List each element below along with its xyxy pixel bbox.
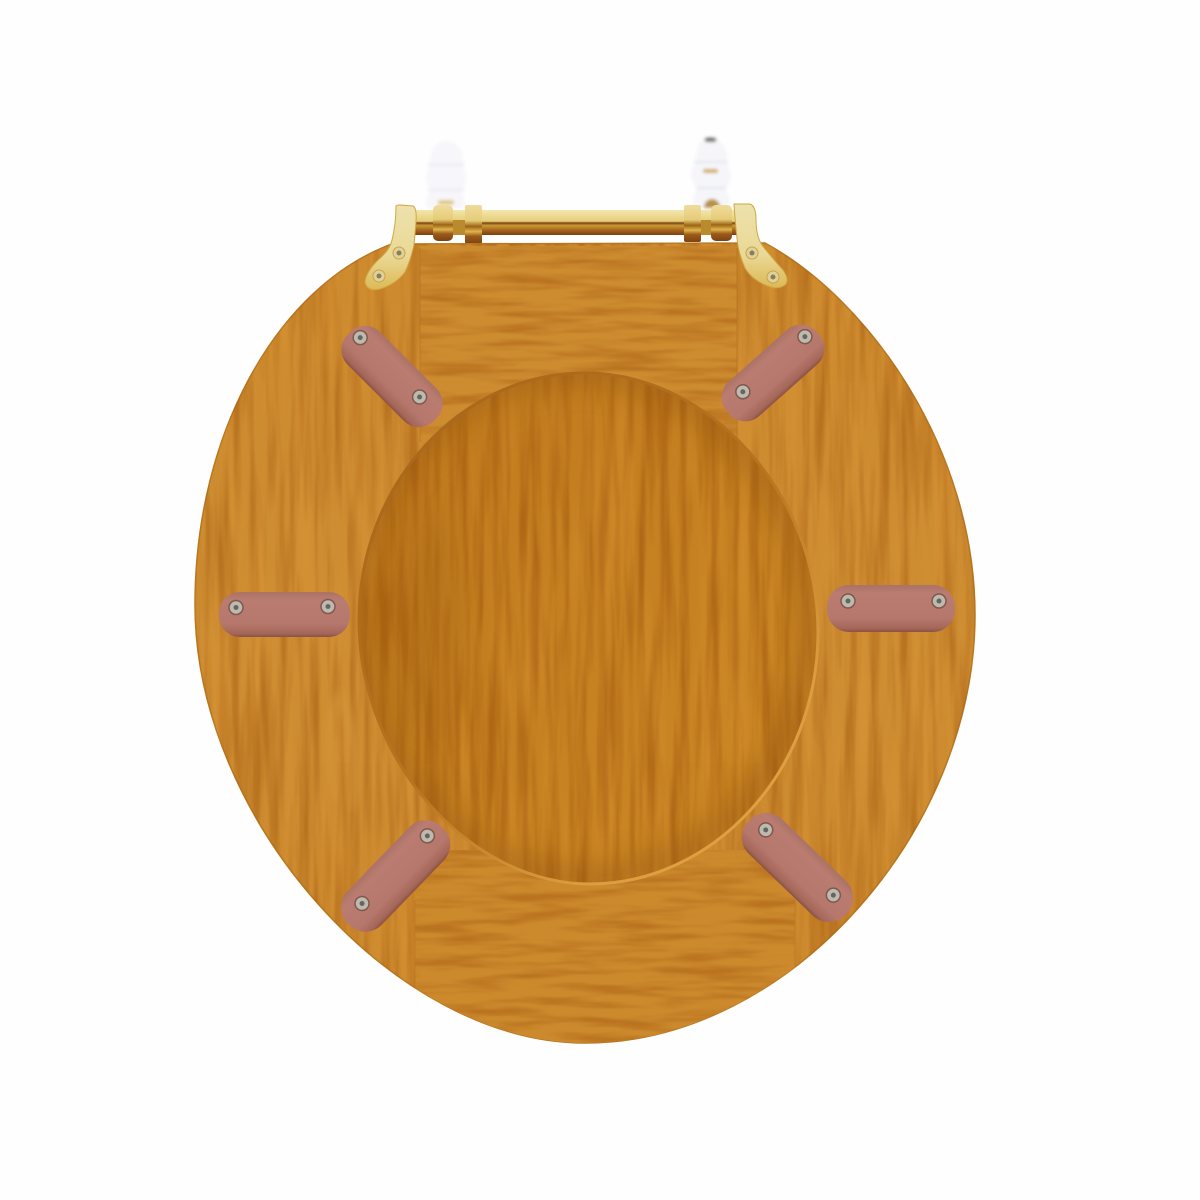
wooden seat [190, 240, 980, 1050]
top panel, horizontal grain [420, 246, 737, 442]
cathedral grain highlight [336, 698, 342, 708]
bevelled rim [359, 373, 818, 884]
illustration: oak toilet seat, underside view [194, 135, 976, 1044]
bumper: bottom right [732, 803, 863, 932]
bumper: top left [333, 317, 451, 436]
bumper: bottom left [331, 811, 460, 941]
left collars [433, 205, 482, 244]
hinge rod [412, 210, 737, 235]
bumper: middle left [219, 592, 350, 637]
inner shadow crescent [353, 369, 812, 880]
seat base [195, 243, 975, 1043]
seat opening [353, 368, 825, 888]
left hinge bracket [365, 205, 416, 290]
bumper: middle right [827, 585, 955, 632]
right white mounting plug [691, 138, 731, 209]
bottom panel, horizontal grain [415, 850, 795, 1050]
wood grain [190, 240, 980, 1050]
bumper: top right [713, 316, 833, 430]
left white mounting plug [426, 141, 466, 209]
right hinge bracket [734, 204, 787, 288]
right collars [684, 205, 732, 242]
hinge assembly [412, 138, 737, 244]
